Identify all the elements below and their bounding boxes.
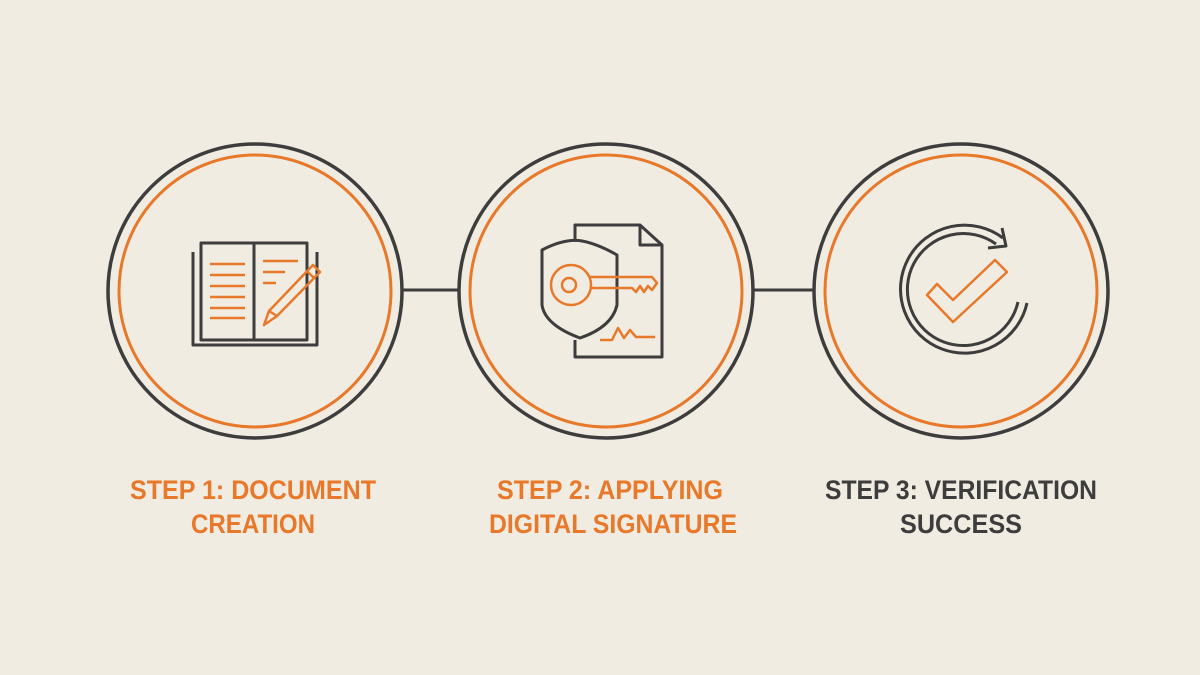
heading: step 3 label xyxy=(825,475,1097,539)
heading: step 2 label: STEP 2: APPLYING xyxy=(497,475,723,505)
heading: step 3 label: SUCCESS xyxy=(900,509,1022,539)
connector line 1-2 xyxy=(403,288,459,292)
panel: step 2 circle xyxy=(459,144,753,438)
icon: circular arrow with check xyxy=(901,225,1027,353)
heading: step 2 label xyxy=(489,475,737,539)
heading: step 3 label: STEP 3: VERIFICATION xyxy=(825,475,1097,505)
heading: step 1 label xyxy=(130,475,376,539)
heading: step 1 label: CREATION xyxy=(191,509,315,539)
connector line 2-3 xyxy=(754,288,813,292)
heading: step 1 label: STEP 1: DOCUMENT xyxy=(130,475,376,505)
heading: step 2 label: DIGITAL SIGNATURE xyxy=(489,509,737,539)
panel: step 3 circle xyxy=(814,144,1108,438)
icon: shield key document xyxy=(542,225,662,357)
panel: step 1 circle xyxy=(108,144,402,438)
icon: book and pencil xyxy=(193,243,320,345)
